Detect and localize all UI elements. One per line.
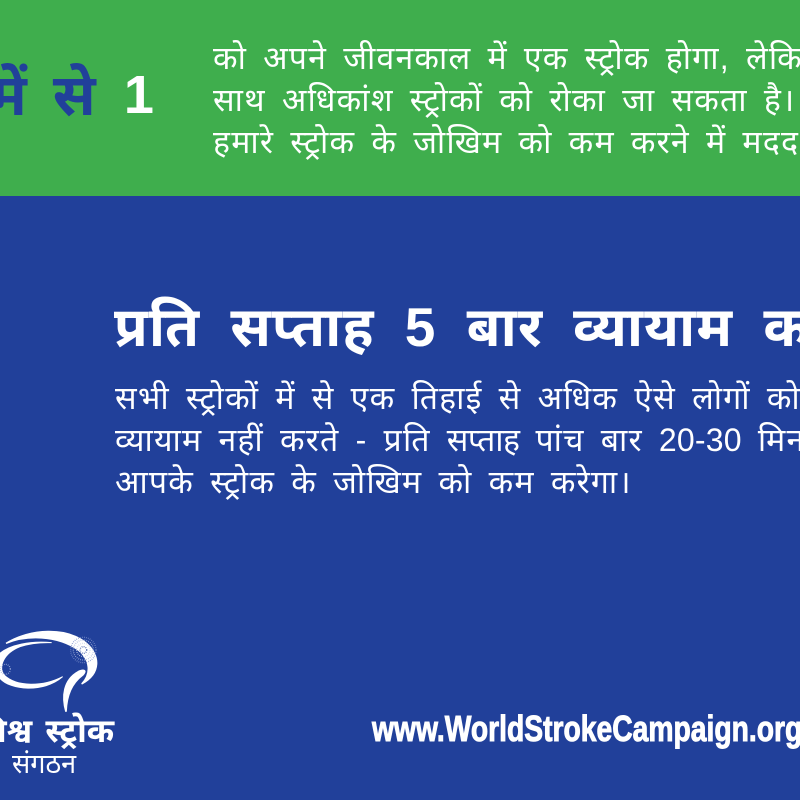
- text block: exercise explanation: [115, 380, 800, 500]
- text block: stroke risk intro: [213, 40, 800, 160]
- text block: stroke risk intro: हमारे स्ट्रोक के जोखिम को कम करने में मदद: [213, 124, 799, 160]
- text block: exercise explanation: सभी स्ट्रोकों में से एक तिहाई से अधिक ऐसे लोगों को: [115, 380, 800, 416]
- text block: exercise explanation: आपके स्ट्रोक के जोखिम को कम करेगा।: [115, 464, 632, 500]
- icon: world stroke organization logo: [0, 630, 98, 712]
- panel: green header band: [0, 0, 800, 196]
- text: campaign website: www.WorldStrokeCampaign.org: [372, 708, 800, 749]
- text: organization subtitle: संगठन: [12, 749, 76, 779]
